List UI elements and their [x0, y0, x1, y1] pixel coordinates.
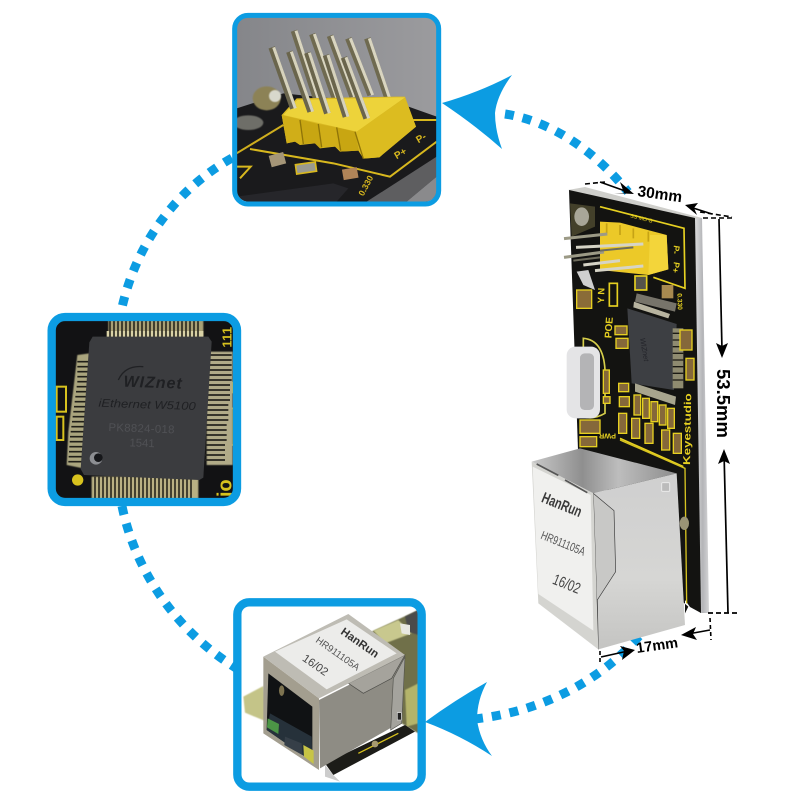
silk outline and parts	[570, 203, 685, 339]
dim arrows	[719, 219, 722, 350]
chip marking: logo arc	[118, 366, 143, 380]
dimension: 17mm	[600, 618, 711, 665]
jack label	[533, 464, 593, 631]
dim label: 30mm	[636, 183, 683, 206]
jack front face frame	[532, 462, 598, 649]
dimension: 30mm	[585, 182, 732, 218]
chip pins: left	[67, 353, 90, 468]
board details in zoom coordinates	[564, 203, 694, 467]
circuit board	[233, 86, 437, 202]
connector side face	[319, 657, 405, 768]
silk outline and parts: Y N	[596, 287, 607, 303]
silk outline and parts: P+	[670, 261, 682, 274]
white label	[275, 619, 397, 689]
connector top face	[263, 614, 405, 698]
connector port opening	[267, 673, 314, 764]
connector side flap	[348, 655, 405, 693]
silk outline and parts: SS MO G	[630, 213, 653, 225]
label brand: HanRun	[539, 490, 584, 521]
panel: pin header photo	[233, 15, 439, 204]
silk outline and parts: POE	[603, 316, 616, 339]
header pins	[564, 234, 643, 271]
board top strip	[568, 187, 702, 219]
jack side fold	[593, 493, 616, 649]
dim dashes	[599, 651, 601, 665]
dark board background	[53, 318, 236, 501]
blue frame	[235, 15, 439, 204]
board front	[569, 190, 701, 613]
label model: HR911105A	[539, 528, 587, 559]
white background	[239, 604, 421, 786]
main board photo	[564, 187, 709, 613]
header yellow block	[600, 222, 668, 275]
blue frame	[52, 317, 237, 502]
yellow board markings	[57, 326, 236, 497]
yellow board markings: io	[214, 479, 236, 497]
dim dashes	[708, 612, 740, 614]
photo background	[237, 17, 437, 202]
chip marking: date code: 1541	[129, 437, 155, 450]
silk line	[620, 438, 683, 467]
dotted ring: bottom right arc	[474, 635, 640, 719]
label date: 16/02	[550, 571, 583, 598]
RJ45 jack on main board	[532, 440, 689, 649]
dim dashes	[585, 182, 605, 184]
back row pins	[294, 31, 391, 103]
crystal	[567, 338, 605, 418]
chip pins: top	[106, 321, 204, 337]
dotted ring: lower left arc	[122, 506, 236, 668]
blue frame	[237, 602, 422, 787]
jack small window	[662, 483, 670, 491]
yellow header	[282, 97, 416, 159]
chip body	[81, 337, 212, 480]
chip marking: part name: iEthernet W5100	[98, 398, 197, 413]
top chip on board	[627, 293, 683, 405]
circuit board: 0.330	[356, 174, 375, 198]
board edge	[693, 218, 709, 613]
front row pins	[272, 47, 369, 118]
board behind connector	[243, 610, 418, 782]
silk text: PWR: PWR	[598, 432, 616, 441]
chip pins: right	[205, 352, 233, 465]
connector small window	[397, 713, 401, 720]
dotted ring: upper left arc	[121, 158, 232, 312]
jack solder pin	[680, 517, 689, 530]
label: brand: HanRun	[338, 626, 381, 661]
top chip on board: WIZnet	[638, 337, 651, 363]
connector latch edge	[391, 657, 405, 730]
jack rear silk	[677, 467, 688, 613]
connector front frame	[263, 657, 319, 770]
yellow board markings: 111	[219, 326, 234, 348]
jack side	[593, 473, 685, 649]
label: date: 16/02	[300, 653, 330, 679]
circuit board: P-	[414, 131, 428, 146]
dim label: 53.5mm	[713, 369, 734, 438]
dotted ring: top right arc	[505, 114, 628, 192]
panel: WIZnet chip photo	[52, 317, 237, 502]
dim label: 17mm	[635, 635, 679, 657]
pin 1 dot	[90, 452, 102, 465]
chip marking: batch: PK8824-018	[108, 422, 175, 436]
jack top	[532, 448, 677, 493]
small components	[580, 326, 694, 453]
chip marking: logo: WIZnet	[123, 374, 183, 393]
silk outline and parts: 0.330	[675, 293, 683, 310]
chip pins: bottom	[92, 477, 198, 501]
dim arrows	[600, 182, 628, 192]
circuit board: P+	[393, 146, 409, 162]
arrow: towards pin header photo	[442, 75, 512, 149]
silk text: brand: Keyestudio	[682, 393, 694, 465]
dimension: 53.5mm	[708, 219, 740, 613]
dim arrows	[601, 651, 628, 657]
label: model: HR911105A	[313, 635, 362, 674]
panel: RJ45 connector photo	[237, 602, 422, 787]
arrow: towards RJ45 photo	[425, 682, 492, 756]
silk outline and parts: P-	[671, 245, 682, 255]
